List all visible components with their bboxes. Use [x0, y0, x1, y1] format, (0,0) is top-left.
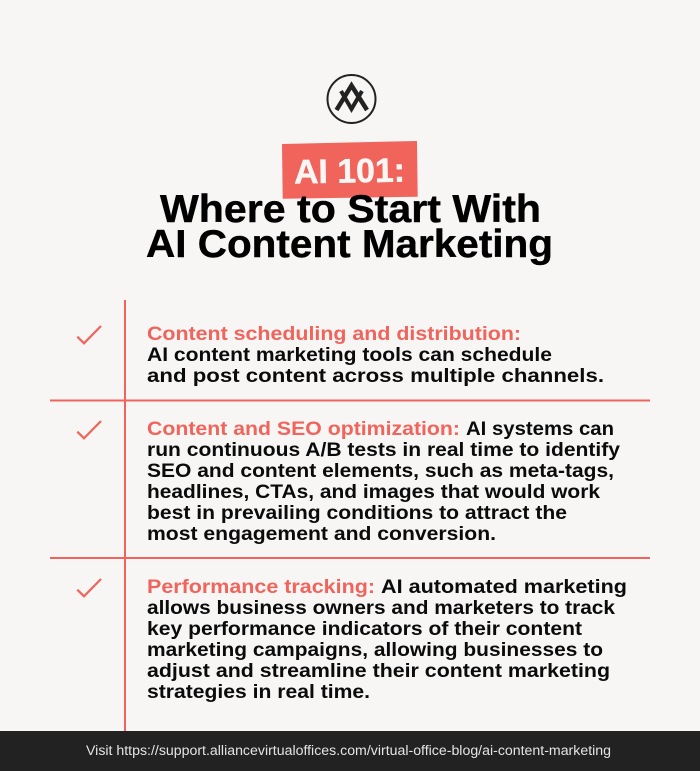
- icon: check mark 2: [77, 421, 101, 438]
- text block: SEO optimization: most engagement and conversion.: [147, 523, 496, 545]
- text block: content scheduling: Content scheduling and distribution:: [147, 323, 521, 345]
- title tag: AI 101: [282, 141, 418, 199]
- text block: SEO optimization: best in prevailing conditions to attract the: [147, 502, 567, 524]
- text block: content scheduling: [147, 323, 604, 387]
- icon: check mark 1: [77, 326, 101, 343]
- text block: SEO optimization: SEO and content elements, such as meta-tags,: [147, 460, 614, 482]
- text block: content scheduling: AI content marketing tools can schedule: [147, 344, 552, 366]
- icon: logo: [328, 75, 376, 123]
- text block: performance tracking: marketing campaigns, allowing businesses to: [147, 639, 603, 661]
- footer bar: Visit https://support.alliancevirtualoffices.com/virtual-office-blog/ai-content-marketing: [86, 743, 611, 758]
- text block: performance tracking: adjust and streamline their content marketing: [147, 660, 610, 682]
- title: Where to Start With: [160, 188, 541, 231]
- text block: SEO optimization: headlines, CTAs, and images that would work: [147, 481, 600, 503]
- text block: performance tracking: [147, 576, 627, 703]
- text block: SEO optimization: Content and SEO optimization:: [147, 418, 460, 440]
- text block: performance tracking: allows business owners and marketers to track: [147, 597, 615, 619]
- text block: performance tracking: key performance indicators of their content: [147, 618, 583, 640]
- text block: performance tracking: AI automated marketing: [381, 576, 627, 598]
- text block: SEO optimization: [147, 418, 620, 545]
- title: AI Content Marketing: [146, 223, 553, 266]
- title tag: AI 101: AI 101:: [294, 152, 405, 191]
- text block: performance tracking: strategies in real time.: [147, 681, 370, 703]
- title: [146, 188, 553, 266]
- table rules: [50, 300, 650, 731]
- text block: performance tracking: Performance tracking:: [147, 576, 375, 598]
- text block: content scheduling: and post content across multiple channels.: [147, 365, 604, 387]
- footer bar: [0, 731, 700, 771]
- text block: SEO optimization: run continuous A/B tests in real time to identify: [147, 439, 620, 461]
- icon: check mark 3: [77, 579, 101, 596]
- text block: SEO optimization: AI systems can: [466, 418, 614, 440]
